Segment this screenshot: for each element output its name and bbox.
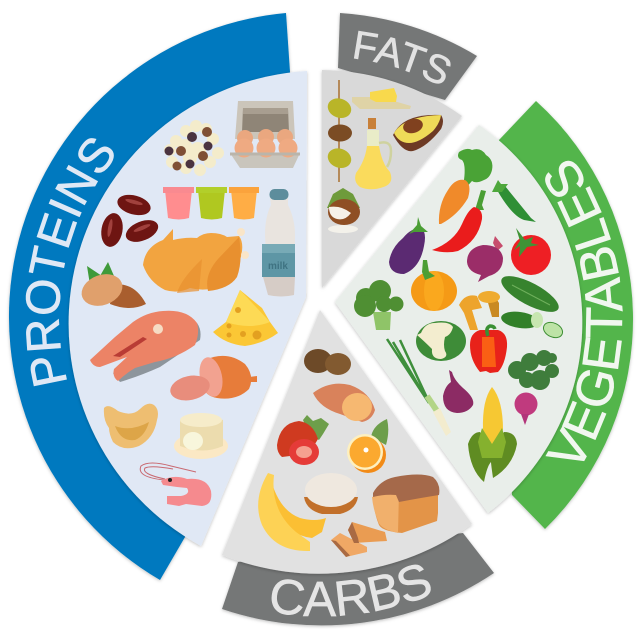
icon: strawberries <box>277 415 329 465</box>
icon: almonds <box>77 262 146 311</box>
icon: milk bottle: milk <box>268 261 288 272</box>
panel: proteins <box>7 12 309 582</box>
icon: olive skewer <box>325 80 354 182</box>
icon: sweet potato <box>313 384 375 423</box>
icon: potatoes <box>304 349 351 375</box>
icon: cucumber slices <box>500 309 565 341</box>
icon: oil jug <box>355 118 391 189</box>
icon: radish with leaves <box>508 350 559 425</box>
proteins food area <box>69 71 307 546</box>
icon: cheese wedge <box>213 290 278 346</box>
icon: chili pepper <box>432 190 486 252</box>
icon: loaf of bread <box>372 474 439 533</box>
vegetables food area <box>335 125 582 513</box>
icon: tomato <box>511 228 551 275</box>
icon: avocado <box>393 115 443 151</box>
icon: red bell pepper <box>470 326 507 373</box>
icon: bread slices <box>331 522 387 557</box>
heading: vegetables: VEGETABLES <box>545 160 623 462</box>
carbs band <box>222 533 494 625</box>
icon: sausage <box>168 355 257 404</box>
panel: carbs <box>221 310 495 628</box>
icon: corn <box>468 387 517 482</box>
heading: carbs: CARBS <box>272 564 431 616</box>
icon: egg carton <box>230 101 300 168</box>
icon: butter <box>352 88 411 109</box>
icon: pumpkin <box>411 260 457 311</box>
icon: roast chicken <box>143 228 249 293</box>
icon: chickpeas <box>164 120 224 176</box>
vegetables band <box>499 101 633 529</box>
icon: bananas <box>258 473 326 551</box>
icon: cashew <box>104 404 158 448</box>
panel: fats <box>320 12 478 289</box>
icon: red onion <box>443 370 473 413</box>
icon: spring onion <box>387 339 451 436</box>
icon: chanterelle mushrooms <box>459 291 500 330</box>
fats band <box>338 13 477 100</box>
carbs food area <box>222 310 472 574</box>
icon: shrimp <box>140 463 211 506</box>
icon: pea pod <box>492 180 536 222</box>
proteins band <box>9 13 290 580</box>
heading: proteins: PROTEINS <box>26 138 114 386</box>
heading: fats: FATS <box>354 30 451 84</box>
panel: vegetables <box>334 101 635 531</box>
icon: broccoli <box>354 280 404 330</box>
fats food area <box>322 70 462 288</box>
icon: salmon steak <box>90 311 201 382</box>
icon: cucumber <box>497 269 563 319</box>
icon: milk bottle <box>262 189 295 296</box>
icon: cauliflower <box>416 321 466 361</box>
icon: kidney beans <box>99 191 161 249</box>
icon: tofu on dish <box>174 413 228 459</box>
icon: orange <box>347 419 388 473</box>
icon: beetroot <box>467 236 503 282</box>
icon: coconut <box>327 188 360 233</box>
icon: eggplant <box>389 217 428 274</box>
icon: yogurt cups <box>163 187 259 220</box>
icon: rice bowl <box>304 473 358 514</box>
icon: carrot <box>439 149 492 224</box>
